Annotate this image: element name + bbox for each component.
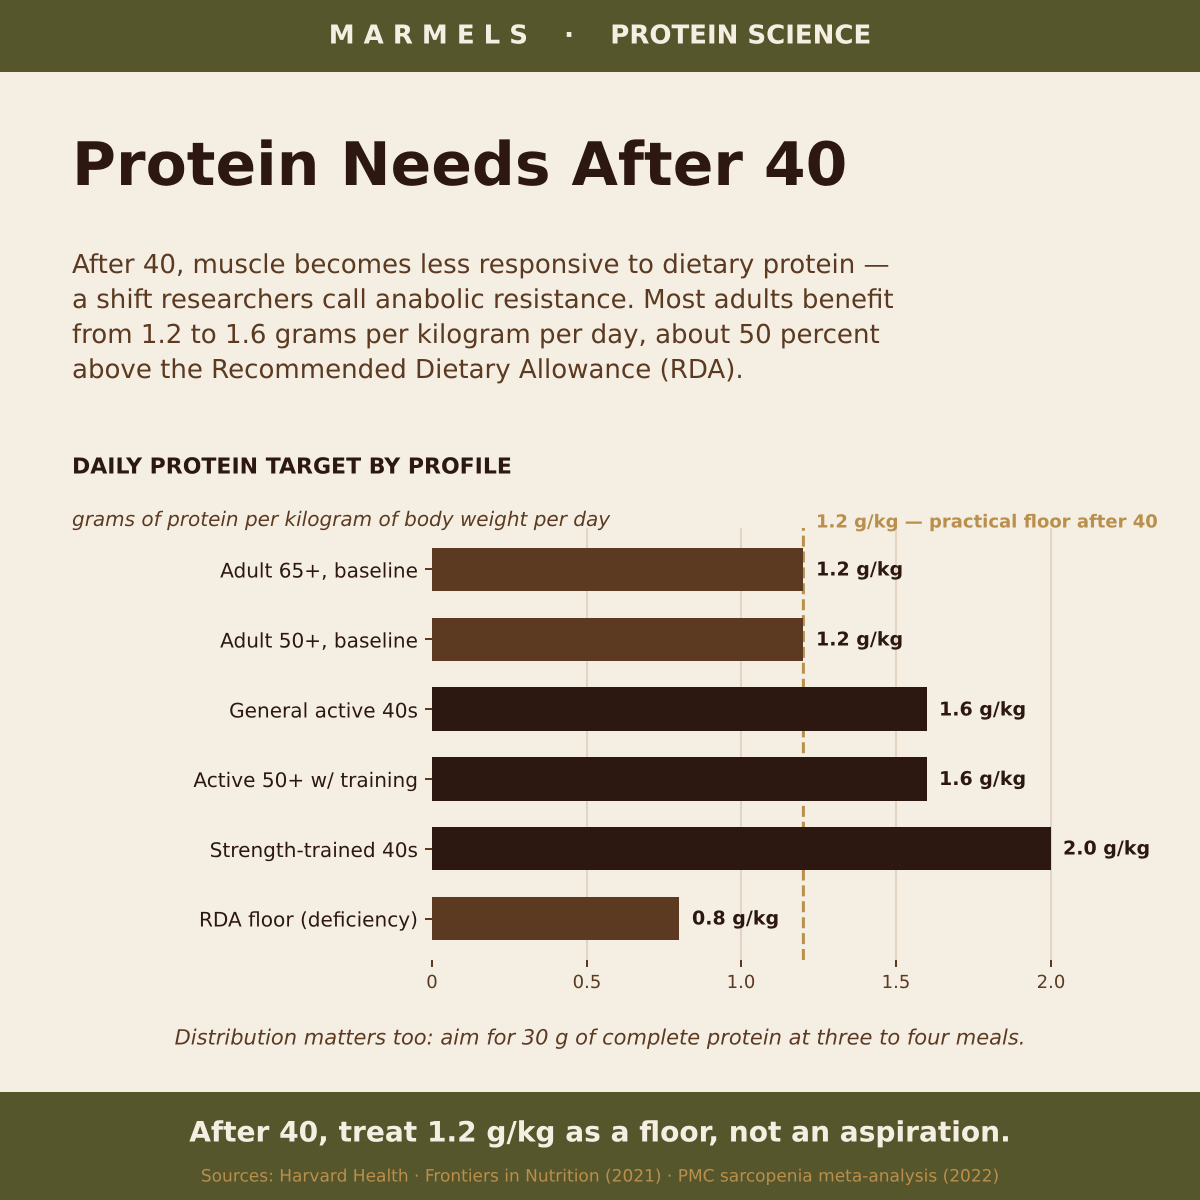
title: Protein Needs After 40: [72, 130, 847, 200]
bar: Adult 50+, baseline: 1.2 g/kg: [816, 628, 903, 650]
bar: Adult 65+, baseline: 1.2 g/kg: [816, 558, 903, 580]
bar: Adult 65+, baseline: [220, 548, 903, 591]
x axis: 2.0: [1037, 972, 1065, 993]
bar: General active 40s: [229, 687, 1026, 731]
bar: Adult 65+, baseline: Adult 65+, baseline: [220, 558, 418, 582]
bar: Adult 50+, baseline: [220, 618, 903, 661]
bar: Strength-trained 40s: Strength-trained 40s: [210, 838, 418, 862]
header band: [0, 0, 1200, 72]
intro paragraph: a shift researchers call anabolic resistance. Most adults benefit: [72, 285, 894, 315]
bar: Strength-trained 40s: 2.0 g/kg: [1063, 838, 1150, 860]
intro paragraph: After 40, muscle becomes less responsive to dietary protein —: [72, 250, 890, 280]
intro paragraph: above the Recommended Dietary Allowance (RDA).: [72, 355, 744, 385]
x axis: 0: [426, 972, 438, 993]
x axis: 1.0: [727, 972, 755, 993]
bar: RDA floor (deficiency): RDA floor (deficiency): [199, 908, 418, 932]
x axis: 0.5: [573, 972, 601, 993]
intro paragraph: from 1.2 to 1.6 grams per kilogram per day, about 50 percent: [72, 320, 880, 350]
bar: RDA floor (deficiency): [199, 897, 779, 940]
bar: General active 40s: 1.6 g/kg: [939, 698, 1026, 720]
sources: Sources: Harvard Health · Frontiers in Nutrition (2021) · PMC sarcopenia meta-analysis (2022): [201, 1166, 999, 1186]
bar chart: [193, 512, 1158, 993]
bar: Active 50+ w/ training: [193, 757, 1026, 801]
bar: General active 40s: General active 40s: [229, 698, 418, 722]
distribution note: Distribution matters too: aim for 30 g of complete protein at three to four meals.: [175, 1026, 1025, 1050]
intro paragraph: [72, 250, 894, 385]
footer band: [0, 1092, 1200, 1200]
bar: RDA floor (deficiency): 0.8 g/kg: [692, 908, 779, 930]
chart heading: DAILY PROTEIN TARGET BY PROFILE: [72, 454, 512, 480]
header band: M A R M E L S · PROTEIN SCIENCE: [329, 20, 871, 50]
bar: Adult 50+, baseline: Adult 50+, baseline: [220, 628, 418, 652]
bar: Active 50+ w/ training: 1.6 g/kg: [939, 768, 1026, 790]
takeaway: After 40, treat 1.2 g/kg as a floor, not an aspiration.: [189, 1116, 1011, 1148]
x axis: [426, 960, 1065, 993]
bar: Strength-trained 40s: [210, 827, 1150, 870]
reference line: 1.2 g/kg: [802, 528, 805, 960]
chart subtitle: grams of protein per kilogram of body weight per day: [72, 507, 611, 531]
reference line label: 1.2 g/kg — practical floor after 40: [816, 512, 1158, 532]
x axis: 1.5: [882, 972, 910, 993]
bar: Active 50+ w/ training: Active 50+ w/ training: [193, 768, 418, 792]
